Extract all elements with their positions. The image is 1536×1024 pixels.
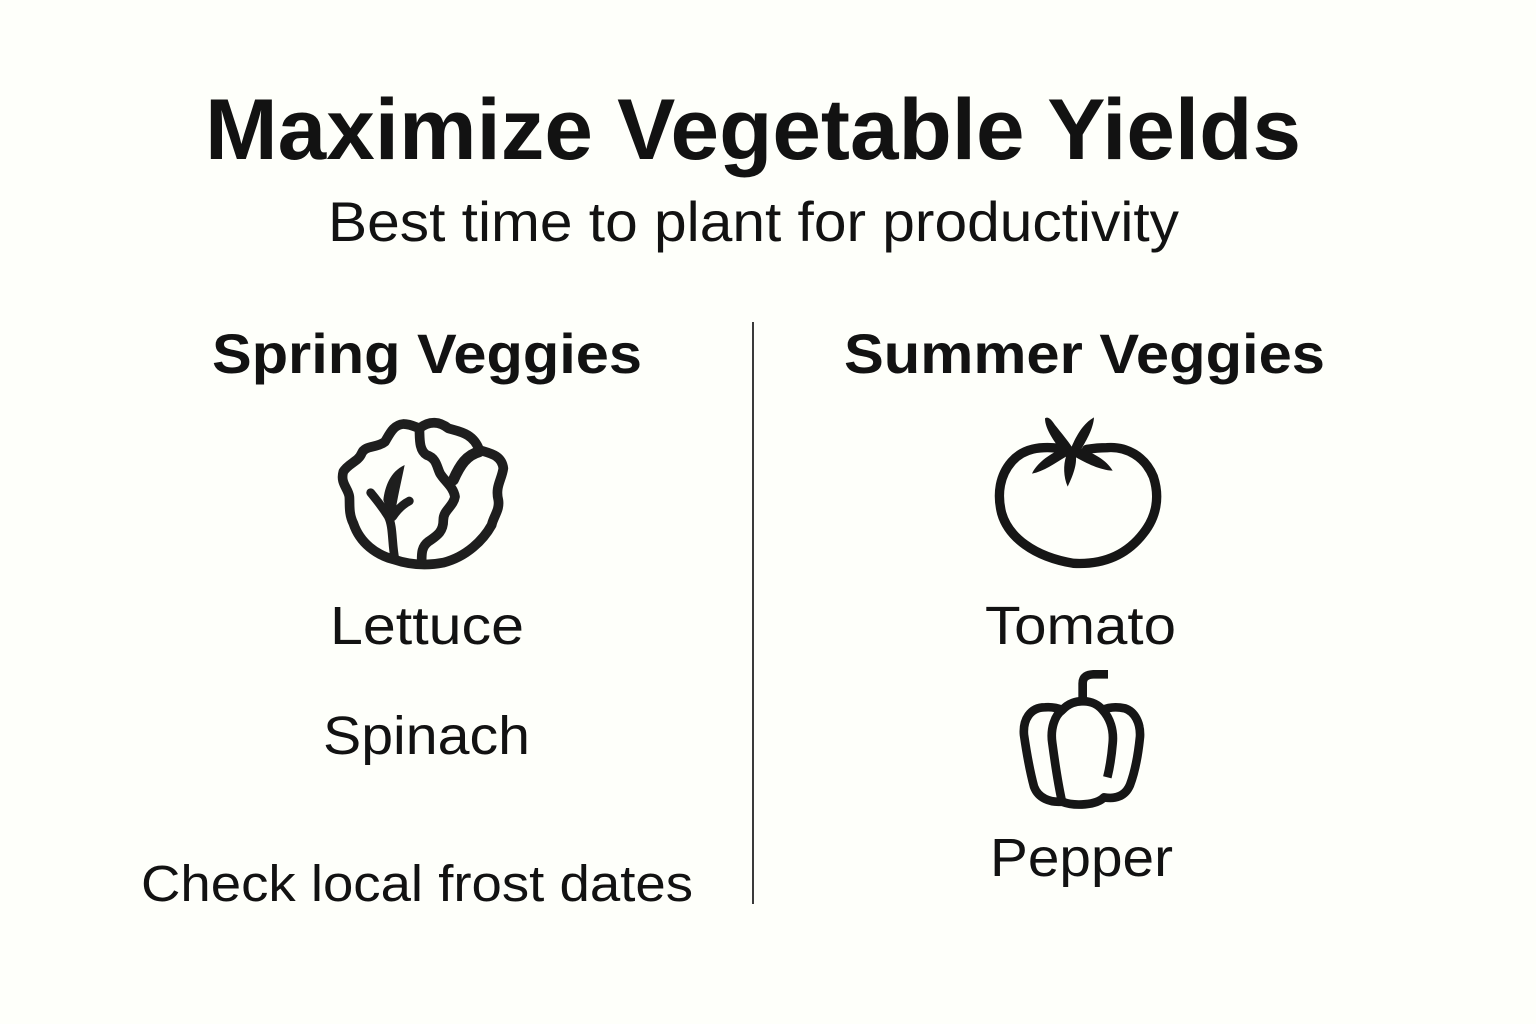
subtitle: Best time to plant for productivity [328,190,1179,253]
label: pepper: Pepper [990,828,1173,888]
label: lettuce: Lettuce [330,596,524,656]
icon: lettuce [343,423,503,565]
panel: spring veggies [141,322,693,912]
title: Maximize Vegetable Yields [205,82,1301,178]
divider between columns [752,322,754,904]
panel: summer veggies [844,322,1325,888]
icon: tomato [999,417,1157,564]
heading: spring veggies: Spring Veggies [212,322,642,385]
label: tomato: Tomato [985,596,1176,656]
icon: pepper [1024,674,1140,805]
note: frost dates: Check local frost dates [141,855,693,912]
heading: summer veggies: Summer Veggies [844,322,1325,385]
label: spinach: Spinach [323,706,530,766]
